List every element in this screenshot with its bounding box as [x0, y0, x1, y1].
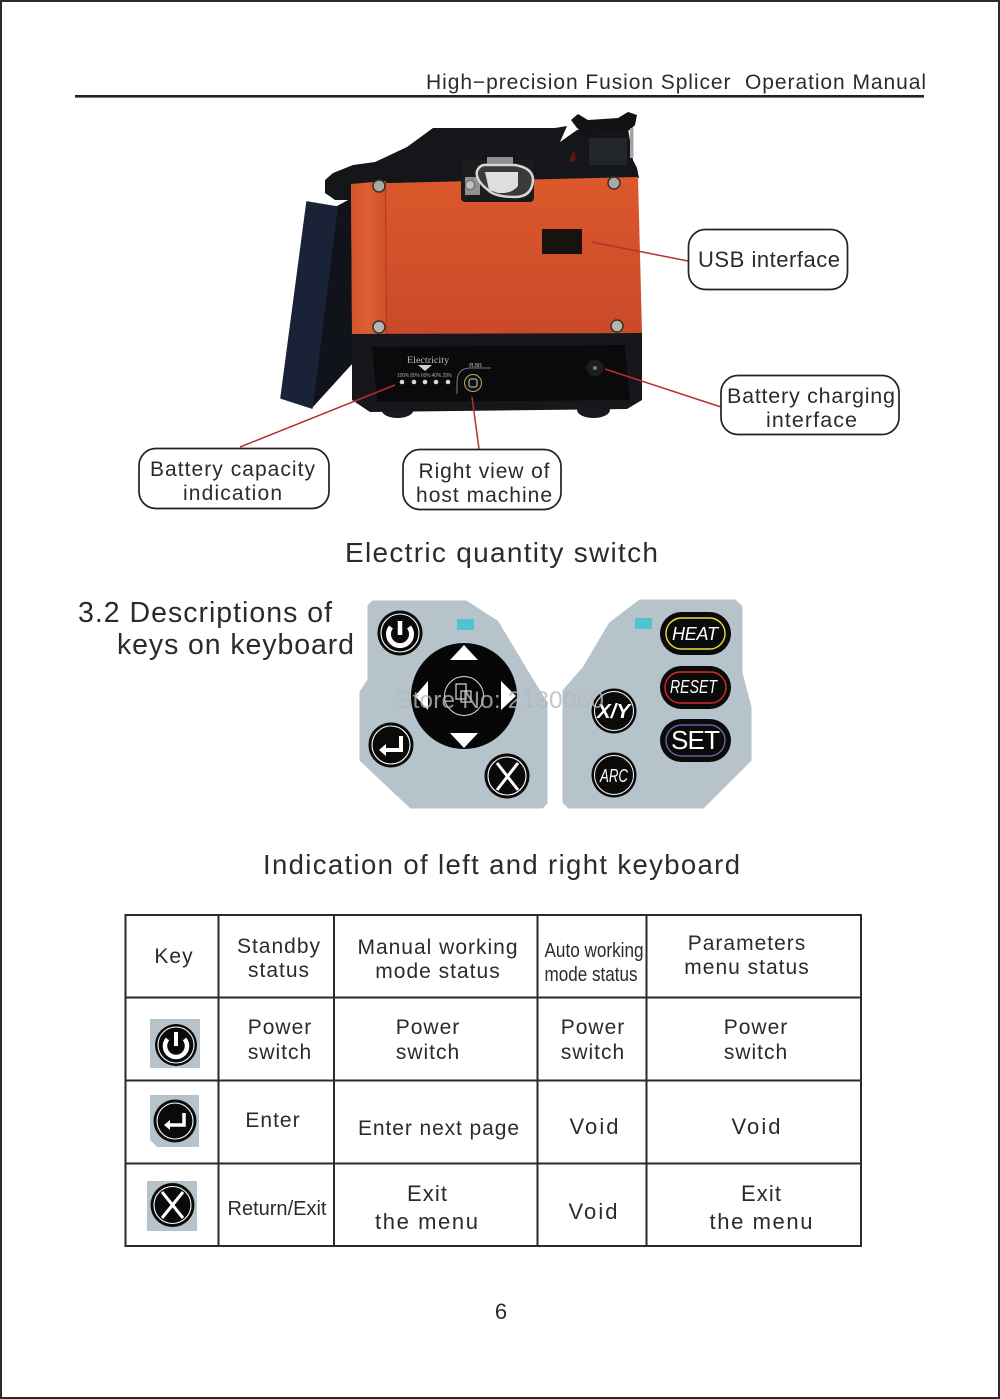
HEAT key: HEAT [672, 624, 720, 644]
ARC key [592, 752, 636, 798]
screws [373, 180, 385, 192]
section heading 3.2: 3.2 Descriptions of [78, 597, 332, 629]
row: return / exit: Exit [741, 1181, 781, 1206]
row: return / exit: the menu [710, 1209, 812, 1234]
callout: Battery capacity indication: Battery capacity [150, 458, 316, 481]
table header row: Manual working [357, 936, 519, 959]
lid hinge shadow [312, 198, 353, 408]
key function table [126, 915, 861, 1246]
caption: Indication of left and right keyboard: Indication of left and right keyboard [263, 849, 740, 880]
row: enter [150, 1095, 780, 1147]
SET key: SET [671, 725, 720, 755]
callout: Right view of host machine: Right view of [418, 460, 550, 483]
row: power switch: Power [724, 1016, 788, 1039]
page header: High−precision Fusion Splicer Operation Manual [426, 71, 926, 94]
SET key [660, 719, 731, 762]
device photo: right view of host machine [281, 112, 642, 418]
callout: Battery capacity indication: indication [183, 482, 282, 505]
row: power switch: switch [724, 1041, 788, 1064]
table header row: Key [154, 945, 194, 968]
USB port [542, 229, 582, 254]
device photo: right view of host machine: 100% 80% 60% 40% 20% [397, 373, 453, 379]
row: power switch: switch [561, 1041, 625, 1064]
indicator light [457, 619, 474, 630]
row: power switch: Power [561, 1016, 625, 1039]
callout: Right view of host machine: host machine [416, 484, 552, 507]
power key [378, 610, 422, 656]
RESET key: RESET [670, 677, 719, 697]
battery panel markings: Electricity [407, 355, 450, 365]
left keyboard panel [361, 602, 546, 807]
top black casing [325, 126, 639, 200]
callout: Battery capacity indication [139, 448, 329, 508]
row: enter: Enter next page [358, 1117, 519, 1140]
table header row: Parameters [688, 932, 806, 955]
orange side panel [351, 177, 642, 335]
table header row [154, 932, 810, 986]
HEAT key [660, 612, 731, 655]
watermark: Store No: 2130060 [396, 687, 604, 714]
row: return / exit [147, 1181, 812, 1234]
callout: Battery charging interface: Battery charging [727, 384, 895, 408]
row: power switch: Power [396, 1016, 460, 1039]
row: power switch: switch [248, 1041, 312, 1064]
row: enter: Void [570, 1114, 618, 1139]
row: return / exit: the menu [375, 1209, 478, 1234]
indicator light [635, 618, 652, 629]
row: return / exit: Exit [407, 1181, 447, 1206]
section heading 3.2: keys on keyboard [117, 629, 354, 661]
row: power switch: switch [396, 1041, 460, 1064]
row: enter: Enter [245, 1109, 301, 1132]
row: power switch [150, 1016, 788, 1068]
battery base [352, 333, 642, 412]
enter key [368, 722, 414, 768]
row: return / exit: Return/Exit [228, 1198, 327, 1220]
table grid [126, 915, 861, 1246]
callout: Battery charging interface [721, 376, 899, 434]
callout: Battery charging interface: interface [766, 408, 857, 432]
table header row: Standby [237, 935, 321, 958]
callout: Right view of host machine [403, 450, 561, 510]
table header row: status [248, 959, 310, 982]
charging jack [586, 360, 604, 376]
table header row: Auto working [544, 940, 644, 962]
callout lines [240, 242, 721, 449]
fiber holder [571, 112, 637, 136]
table header row: menu status [684, 956, 810, 979]
callout: USB interface: USB interface [698, 247, 840, 272]
X/Y key: X/Y [596, 701, 632, 723]
page number: 6 [495, 1299, 507, 1324]
row: power switch: Power [248, 1016, 312, 1039]
table header row: mode status [544, 964, 638, 986]
section heading 3.2 [78, 597, 354, 661]
handle latch [461, 160, 534, 202]
caption: Electric quantity switch: Electric quantity switch [345, 537, 658, 568]
ARC key: ARC [599, 766, 629, 786]
table header row: mode status [375, 960, 501, 983]
row: enter: Void [732, 1114, 780, 1139]
right keyboard panel [564, 601, 750, 807]
row: return / exit: Void [568, 1199, 618, 1224]
RESET key [660, 666, 731, 709]
rubber feet [382, 402, 414, 418]
direction pad [411, 643, 517, 749]
X/Y key [592, 688, 636, 734]
device photo: right view of host machine: PUSH [469, 362, 482, 369]
exit key [484, 754, 530, 798]
callout: USB interface [688, 230, 848, 290]
open lid [281, 202, 337, 408]
